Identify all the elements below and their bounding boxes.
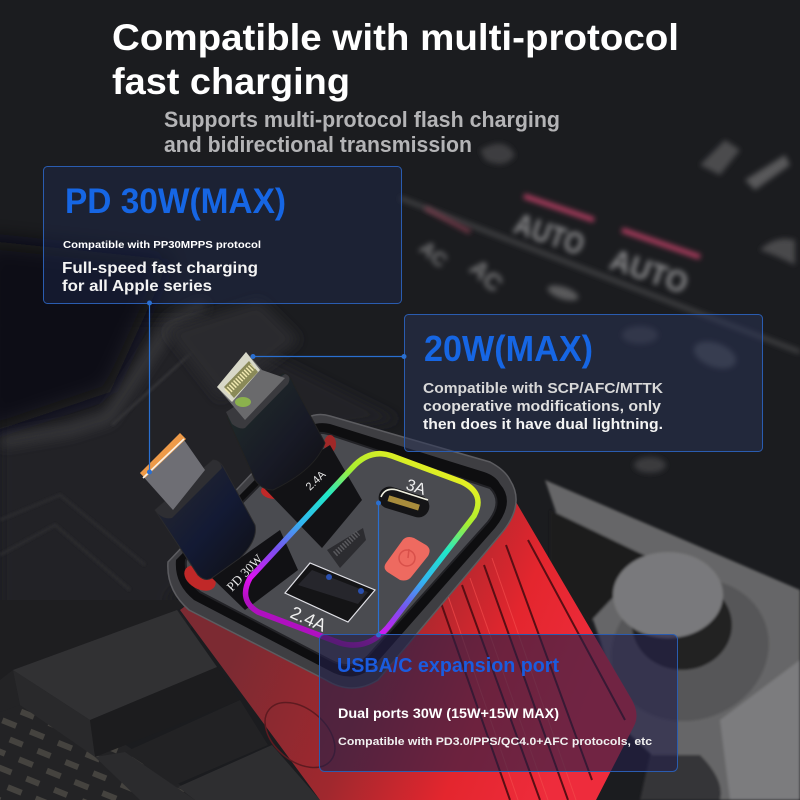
PD 30W description — [62, 260, 258, 295]
lightning plug — [217, 352, 366, 568]
panel: USBA/C expansion port — [320, 634, 678, 772]
title — [112, 17, 679, 102]
grey head face — [186, 433, 497, 665]
panel: PD 30W — [44, 166, 402, 304]
20W description — [423, 381, 664, 433]
callout line: 20W to lightning plug — [250, 354, 406, 359]
blurred AUTO buttons: AUTO — [510, 207, 589, 262]
charger product — [140, 352, 637, 800]
red ribbed body — [180, 502, 637, 800]
subtitle — [164, 107, 560, 157]
dual ports line: Dual ports 30W (15W+15W MAX) — [338, 705, 559, 721]
PD 30W description: Full-speed fast charging — [62, 260, 258, 277]
power button — [385, 537, 430, 580]
protocol compatibility line: Compatible with PD3.0/PPS/QC4.0+AFC protocols, etc — [338, 736, 652, 748]
USB-C plug — [140, 433, 298, 610]
subtitle: Supports multi-protocol flash charging — [164, 107, 560, 132]
title: Compatible with multi-protocol — [112, 17, 679, 58]
PD 30W heading: PD 30W(MAX) — [65, 182, 286, 221]
20W description: Compatible with SCP/AFC/MTTK — [423, 381, 664, 397]
blurred AUTO buttons: AUTO — [606, 243, 692, 301]
PD 30W protocol note: Compatible with PP30MPPS protocol — [63, 239, 261, 251]
20W description: cooperative modifications, only — [423, 399, 661, 415]
left dashboard bands — [0, 240, 400, 690]
USB-C port with 3A label: 3A — [404, 477, 428, 499]
callout line: PD 30W to USB-C plug — [147, 300, 152, 474]
blurred AUTO buttons: AC — [464, 254, 508, 298]
black head rim — [168, 414, 516, 688]
PD 30W description: for all Apple series — [62, 278, 212, 295]
USB-A port with 2.4A label: 2.4A — [287, 602, 329, 636]
USB-C port with 3A label — [376, 477, 432, 520]
callout line: USB-C port to expansion panel — [376, 500, 381, 638]
blurred AUTO buttons: AC — [415, 237, 451, 272]
USB-A port with 2.4A label — [285, 563, 375, 636]
panel: 20W — [404, 314, 762, 452]
20W description: then does it have dual lightning. — [423, 417, 663, 433]
right cup holder — [545, 480, 800, 800]
title: fast charging — [112, 61, 350, 102]
blurred AUTO buttons — [415, 140, 795, 473]
lightning plug: 2.4A — [304, 468, 329, 493]
lower left console box — [0, 600, 320, 800]
subtitle: and bidirectional transmission — [164, 132, 472, 157]
USB-C plug: PD 30W — [223, 551, 266, 594]
USBA/C heading: USBA/C expansion port — [337, 655, 559, 677]
dashboard diagonal strip — [400, 198, 800, 352]
red socket glimpses — [180, 435, 336, 596]
LED ring — [246, 454, 478, 645]
20W heading: 20W(MAX) — [424, 328, 593, 369]
inner black bezel — [176, 423, 507, 677]
